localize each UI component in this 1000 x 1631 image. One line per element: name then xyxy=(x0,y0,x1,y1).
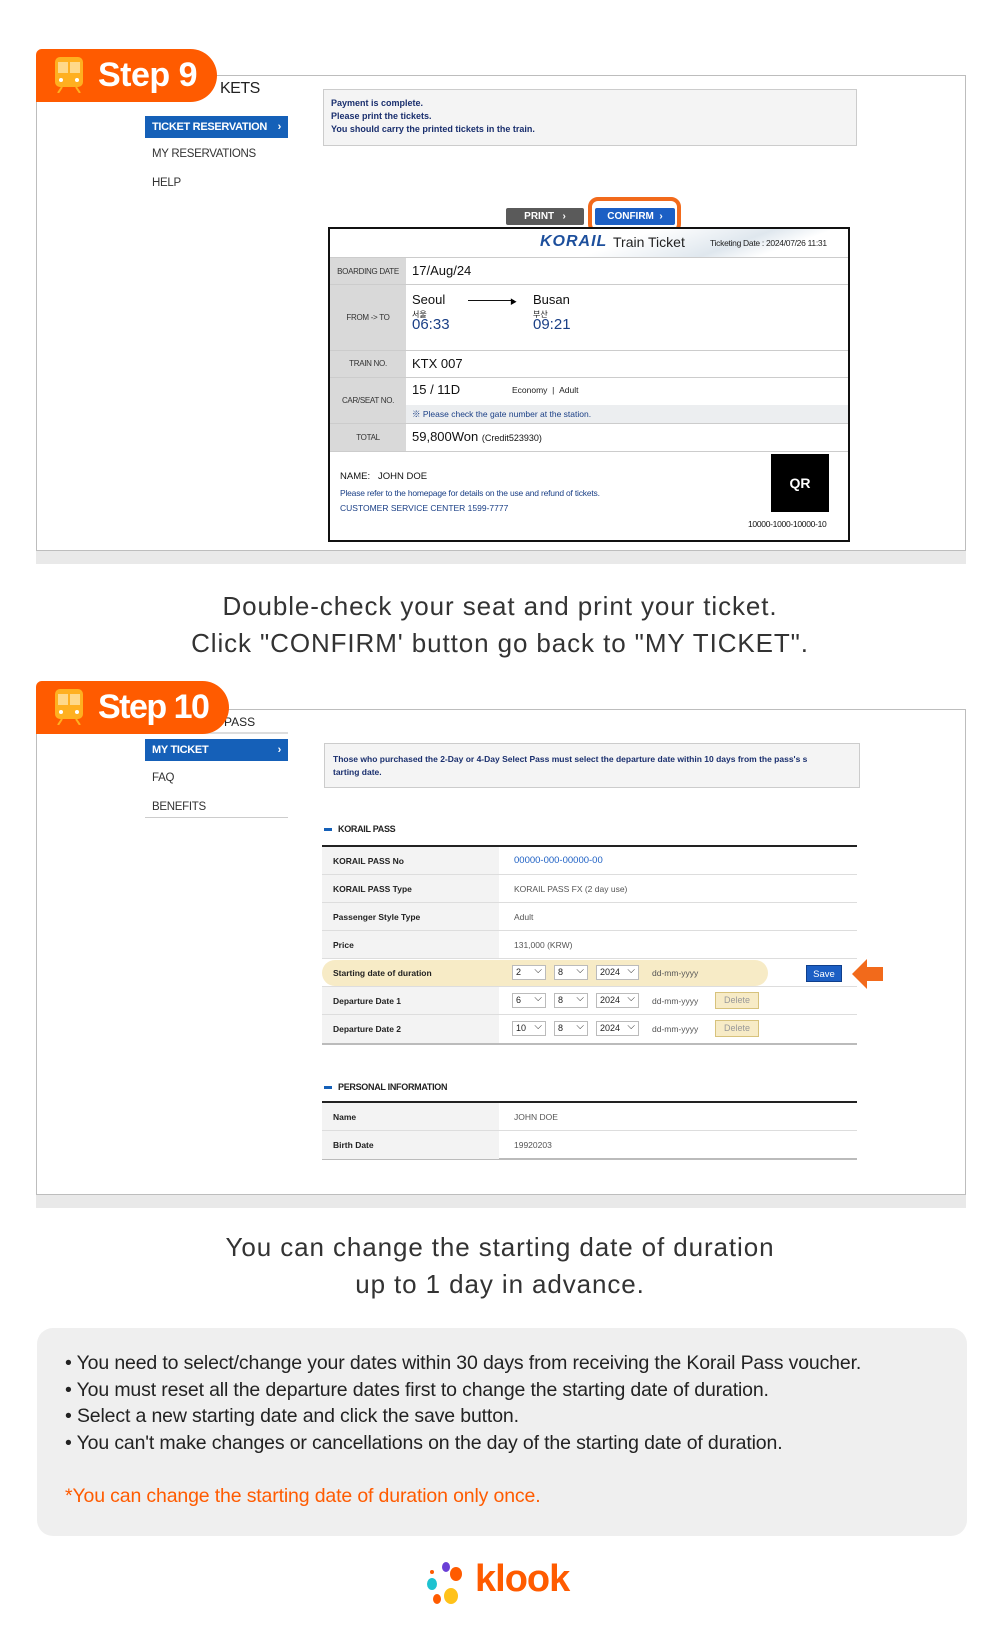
row: from to: FROM -> TO xyxy=(346,313,390,322)
table: korail pass: 8 xyxy=(558,995,563,1005)
badge: step 10 xyxy=(36,681,229,734)
logo: klook: klook xyxy=(475,1558,569,1600)
row: from to: 09:21 xyxy=(533,316,571,333)
bullet list: • You can't make changes or cancellations on the day of the starting date of duration. xyxy=(65,1432,782,1454)
table: korail pass: Delete xyxy=(724,995,750,1005)
menu: my reservations: MY RESERVATIONS xyxy=(152,148,256,160)
passenger info: NAME: JOHN DOE xyxy=(340,471,427,482)
badge: step 9 xyxy=(36,49,217,102)
table: korail pass: KORAIL PASS FX (2 day use) xyxy=(514,884,627,894)
row: train no: KTX 007 xyxy=(412,356,463,371)
table: personal info: JOHN DOE xyxy=(514,1112,558,1122)
row: starting date highlighted: 2 xyxy=(516,967,521,977)
row: boarding date xyxy=(330,257,848,285)
menu: ticket reservation xyxy=(145,116,288,138)
row: starting date highlighted: dd-mm-yyyy xyxy=(652,968,698,978)
message box xyxy=(323,89,857,146)
table: korail pass: Departure Date 1 xyxy=(333,996,401,1006)
menu: my ticket xyxy=(145,739,288,761)
ticket header: Train Ticket xyxy=(613,234,685,250)
print button: PRINT › xyxy=(524,211,566,222)
confirm button with highlight xyxy=(588,197,681,234)
row: from to: 부산 xyxy=(533,310,548,319)
caption step 9: Click "CONFIRM' button go back to "MY TICKET". xyxy=(191,628,809,658)
caption step 10 xyxy=(226,1232,774,1299)
row: from to: 서울 xyxy=(412,310,427,319)
bullet list: • You need to select/change your dates within 30 days from receiving the Korail Pass voucher. xyxy=(65,1352,861,1374)
menu: my ticket: › xyxy=(278,744,281,756)
row: starting date highlighted: Starting date of duration xyxy=(333,968,432,978)
ticket number: 10000-1000-10000-10 xyxy=(748,519,826,529)
table: korail pass: Delete xyxy=(724,1023,750,1033)
table: korail pass: dd-mm-yyyy xyxy=(652,996,698,1006)
logo: klook xyxy=(427,1558,570,1604)
warning note: *You can change the starting date of duration only once. xyxy=(65,1485,540,1507)
caption step 9 xyxy=(191,591,809,658)
notes box xyxy=(37,1328,967,1536)
menu: ticket reservation: TICKET RESERVATION xyxy=(152,121,267,133)
row: boarding date: 17/Aug/24 xyxy=(412,263,471,278)
table: korail pass: 6 xyxy=(516,995,521,1005)
table: personal info: Birth Date xyxy=(333,1140,374,1150)
row: from to: Seoul xyxy=(412,292,445,307)
row: car seat: 15 / 11D xyxy=(412,382,460,397)
menu: my ticket: MY TICKET xyxy=(152,744,208,756)
table: korail pass: dd-mm-yyyy xyxy=(652,1024,698,1034)
table: korail pass: 10 xyxy=(516,1023,526,1033)
row: car seat xyxy=(330,377,848,423)
notice box: Those who purchased the 2-Day or 4-Day Select Pass must select the departure date within 10 days from the pass's s xyxy=(333,754,807,764)
row: car seat: CAR/SEAT NO. xyxy=(342,396,394,405)
notice box xyxy=(324,743,860,788)
passenger info: Please refer to the homepage for details on the use and refund of tickets. xyxy=(340,488,600,498)
row: train no: TRAIN NO. xyxy=(349,359,387,368)
menu title: PASS xyxy=(224,715,255,729)
row: train no xyxy=(330,350,848,377)
heading: personal information: PERSONAL INFORMATION xyxy=(338,1082,447,1092)
save button xyxy=(806,965,842,982)
print button xyxy=(506,208,584,225)
table: personal info xyxy=(322,1101,857,1160)
row: total xyxy=(330,423,848,451)
ticket header: Ticketing Date : 2024/07/26 11:31 xyxy=(710,238,827,248)
save button: Save xyxy=(813,969,835,980)
table: korail pass: Departure Date 2 xyxy=(333,1024,401,1034)
confirm button with highlight: CONFIRM › xyxy=(607,211,663,222)
menu: help: HELP xyxy=(152,177,181,189)
row: total: 59,800Won (Credit523930) xyxy=(412,429,542,444)
QR code xyxy=(771,454,829,512)
row: from to: ▶ xyxy=(510,299,517,306)
row: car seat: ※ Please check the gate number at the station. xyxy=(412,409,591,419)
table: korail pass: 131,000 (KRW) xyxy=(514,940,572,950)
menu: ticket reservation: › xyxy=(278,121,281,133)
row: from to xyxy=(330,284,848,350)
row: starting date highlighted xyxy=(322,959,857,987)
row: car seat: Economy | Adult xyxy=(512,385,578,395)
table: korail pass xyxy=(322,845,857,1045)
row: from to: 06:33 xyxy=(412,316,450,333)
message box: Payment is complete. xyxy=(331,98,423,108)
row: boarding date: BOARDING DATE xyxy=(337,267,399,276)
table: korail pass: KORAIL PASS No xyxy=(333,856,404,866)
message box: You should carry the printed tickets in the train. xyxy=(331,124,535,134)
caption step 9: Double-check your seat and print your ticket. xyxy=(222,591,777,621)
table: korail pass: 00000-000-00000-00 xyxy=(514,855,603,866)
bullet list: • You must reset all the departure dates first to change the starting date of duration. xyxy=(65,1378,769,1400)
row: from to: Busan xyxy=(533,292,570,307)
bullet list xyxy=(65,1352,861,1454)
QR code: QR xyxy=(790,475,810,491)
notice box: tarting date. xyxy=(333,767,382,777)
row: total: TOTAL xyxy=(356,433,380,442)
icon: train xyxy=(55,57,83,93)
panel: step 10 screenshot xyxy=(36,709,966,1195)
caption step 10: You can change the starting date of duration xyxy=(226,1232,774,1262)
table: personal info: Name xyxy=(333,1112,356,1122)
ticket header: KORAIL xyxy=(540,233,607,250)
menu: faq: FAQ xyxy=(152,772,174,784)
table: korail pass: Price xyxy=(333,940,354,950)
menu title: KETS xyxy=(220,80,260,97)
caption step 10: up to 1 day in advance. xyxy=(355,1269,645,1299)
table: personal info: 19920203 xyxy=(514,1140,552,1150)
passenger info xyxy=(340,471,600,513)
badge: step 10: Step 10 xyxy=(98,688,208,726)
panel: step 9 screenshot xyxy=(36,75,966,551)
table: korail pass: Passenger Style Type xyxy=(333,912,420,922)
row: starting date highlighted: 2024 xyxy=(600,967,620,977)
table: korail pass: KORAIL PASS Type xyxy=(333,884,412,894)
arrow: pointing to save xyxy=(852,959,883,989)
menu: benefits: BENEFITS xyxy=(152,801,206,813)
ticket xyxy=(328,227,850,542)
table: korail pass: 8 xyxy=(558,1023,563,1033)
message box: Please print the tickets. xyxy=(331,111,432,121)
passenger info: CUSTOMER SERVICE CENTER 1599-7777 xyxy=(340,503,508,513)
table: korail pass: 2024 xyxy=(600,995,620,1005)
ticket header xyxy=(330,229,848,257)
badge: step 9: Step 9 xyxy=(98,56,197,94)
heading: korail pass: KORAIL PASS xyxy=(338,824,395,834)
table: korail pass: 2024 xyxy=(600,1023,620,1033)
bullet list: • Select a new starting date and click the save button. xyxy=(65,1405,519,1427)
row: starting date highlighted: 8 xyxy=(558,967,563,977)
icon: train xyxy=(55,689,83,725)
table: korail pass: Adult xyxy=(514,912,533,922)
